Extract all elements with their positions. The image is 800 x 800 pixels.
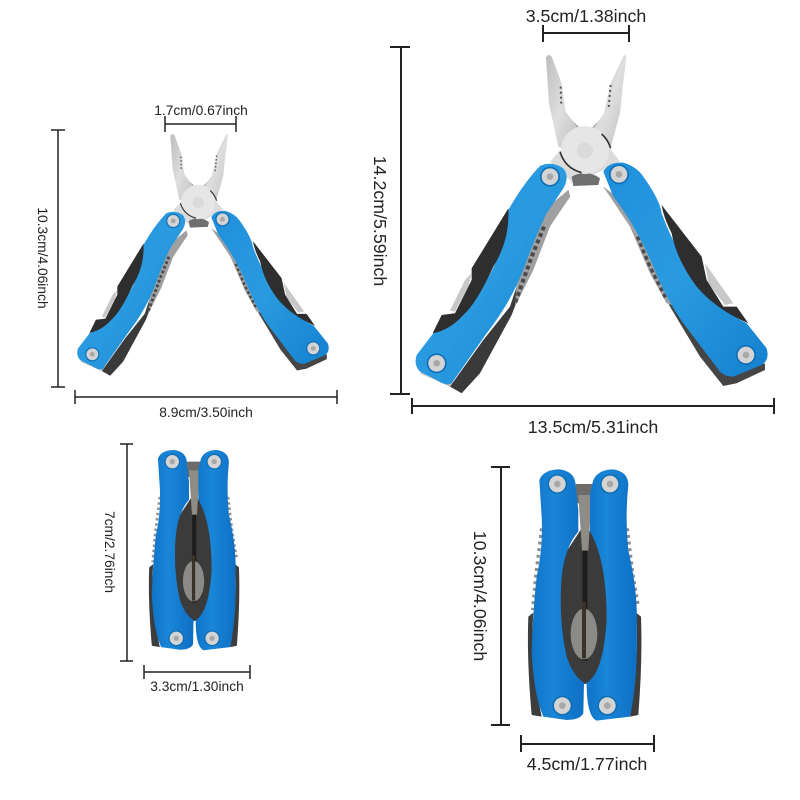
dimension: large open height xyxy=(370,47,410,394)
icon: large closed multitool xyxy=(528,469,641,721)
dimension: large open jaw width xyxy=(526,6,646,42)
dimension: small open height: 10.3cm/4.06inch xyxy=(35,207,50,309)
dimension: small closed width: 3.3cm/1.30inch xyxy=(150,679,244,694)
dimension: small open width xyxy=(75,390,337,420)
icon: small closed multitool xyxy=(149,450,239,650)
icon: small open multitool xyxy=(77,134,329,376)
dimension: small open jaw width: 1.7cm/0.67inch xyxy=(154,103,248,118)
dimension: small closed height: 7cm/2.76inch xyxy=(102,511,117,593)
dimension: large closed height xyxy=(470,467,510,725)
dimension: small open height xyxy=(35,130,65,387)
dimension: large closed height: 10.3cm/4.06inch xyxy=(470,531,490,661)
dimension: small closed height xyxy=(102,444,133,661)
dimension: large open jaw width: 3.5cm/1.38inch xyxy=(526,6,646,26)
dimension: large closed width: 4.5cm/1.77inch xyxy=(527,754,647,774)
dimension: large open width: 13.5cm/5.31inch xyxy=(528,417,658,437)
dimension: large closed width xyxy=(521,735,654,774)
dimension: large open width xyxy=(412,398,774,437)
dimension: small closed width xyxy=(144,665,250,694)
dimension: small open jaw width xyxy=(154,103,248,132)
dimension: small open width: 8.9cm/3.50inch xyxy=(159,405,253,420)
dimension: large open height: 14.2cm/5.59inch xyxy=(370,156,390,286)
icon: large open multitool xyxy=(416,55,768,393)
